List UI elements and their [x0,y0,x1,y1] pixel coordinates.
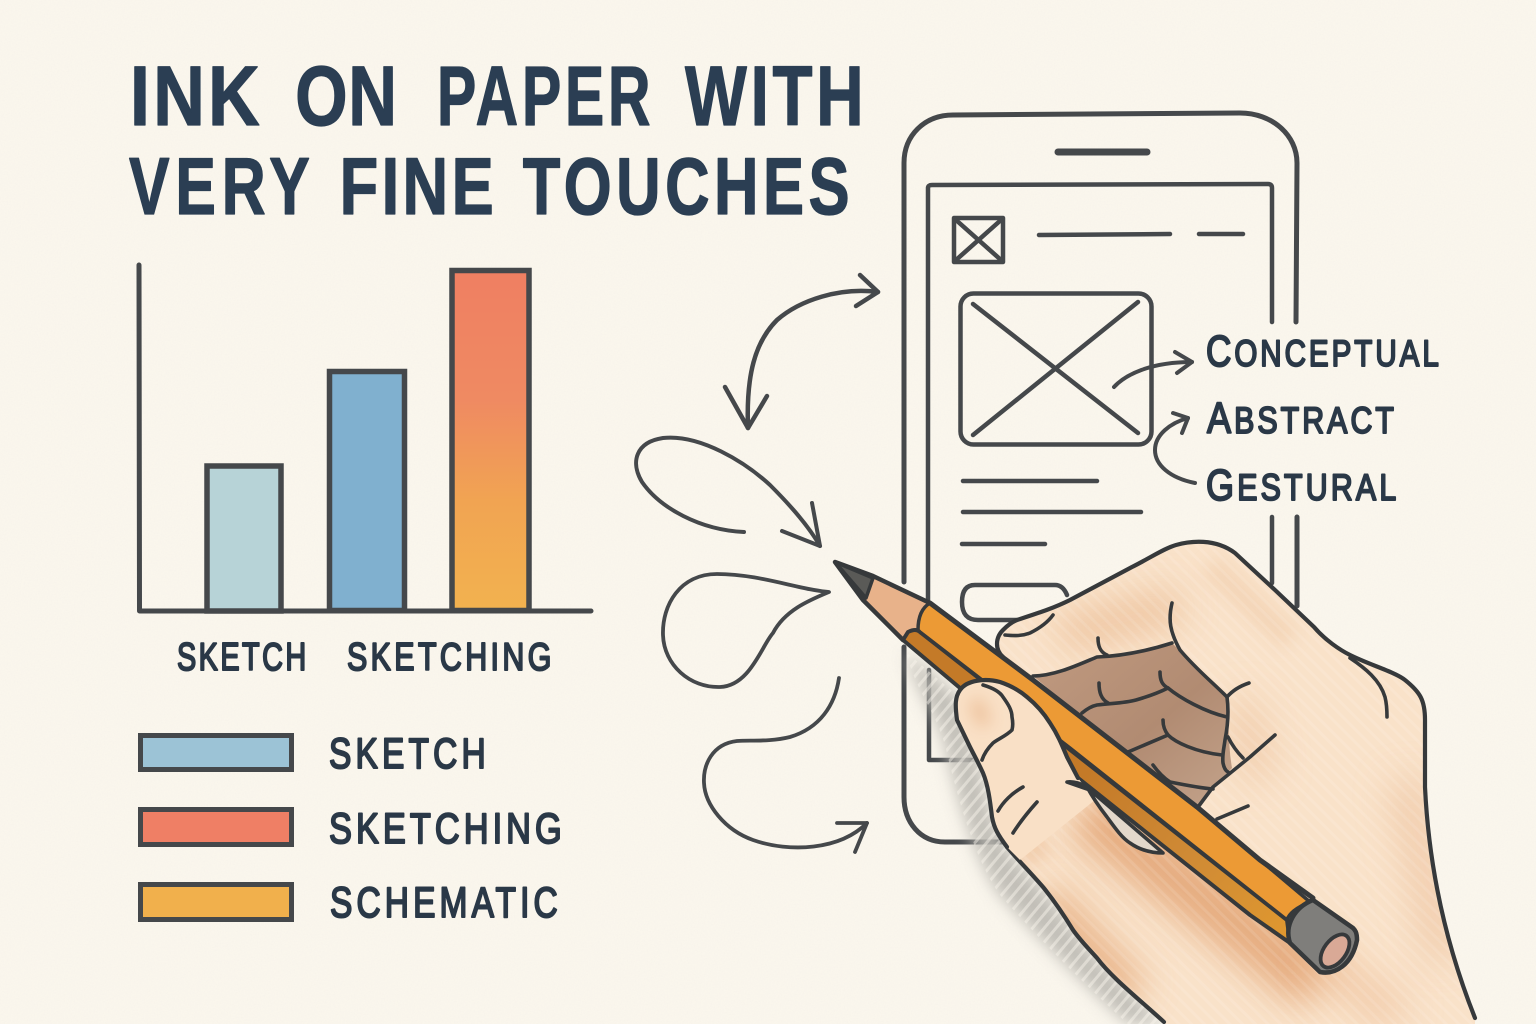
pencil wood cone [835,562,930,640]
teardrop gesture loop [663,574,829,687]
thumb outline [956,680,1078,847]
hand outline [997,542,1475,1018]
pencil lower facet [903,630,1290,943]
pencil top edge [930,603,1313,898]
title: WITH [685,49,864,143]
arrow: gestural to abstract [1155,413,1195,483]
chart label: sketching: SKETCHING [347,635,551,679]
bar chart [139,265,591,611]
fingernail [1005,615,1053,636]
text lines [962,481,1141,544]
hand skin fill [956,542,1475,1024]
legend swatch: sketch [140,736,292,770]
legend swatch: sketching [140,810,292,844]
palm shadow [1033,643,1232,812]
icon: image placeholder [954,218,1003,262]
thumb creases [998,787,1037,833]
phone wireframe [904,113,1297,842]
arrow: curved double-headed [725,275,878,428]
button outline [962,585,1067,620]
pencil [835,562,1357,973]
arrow: looping stroke [636,438,820,546]
pencil upper facet [918,603,1310,920]
bar: sketch [207,466,281,611]
phone screen [928,184,1272,760]
thumbnail [982,685,1013,760]
finger creases [1033,603,1387,819]
bar: sketching gradient [452,270,529,610]
bar: middle blue [330,372,404,610]
chart axes [139,265,591,611]
pencil graphite tip [835,562,873,598]
title: ON [295,50,397,144]
legend [140,730,562,927]
header lines [1039,234,1243,235]
phone speaker [1058,148,1147,156]
pencil eraser end [1315,929,1355,973]
legend label: sketch: SKETCH [329,730,486,778]
title: VERY [129,142,310,232]
hand shadow [906,652,1164,1024]
phone outer body [904,113,1297,842]
hand [950,540,1480,1024]
title: FINE [340,142,494,232]
pencil ferrule [1288,900,1357,973]
title: INK [130,48,260,143]
title: PAPER [437,50,650,144]
legend swatch: schematic [140,884,292,920]
legend label: schematic: SCHEMATIC [330,879,558,927]
knuckle pocket [1067,782,1163,853]
chart label: sketch: SKETCH [177,636,306,679]
thumb shading [975,700,985,725]
thumb and grip [956,680,1163,860]
label: conceptual: CONCEPTUAL [1206,327,1439,376]
label: gestural: GESTURAL [1206,461,1396,510]
thumb skin [956,680,1095,860]
hand shading [1021,562,1453,1024]
arrow: squiggle [704,678,867,852]
legend label: sketching: SKETCHING [329,805,562,853]
title: TOUCHES [523,142,850,232]
label: abstract: ABSTRACT [1207,394,1394,443]
image placeholder box [960,294,1152,444]
arrow: to conceptual [1114,352,1192,387]
title [129,48,864,232]
